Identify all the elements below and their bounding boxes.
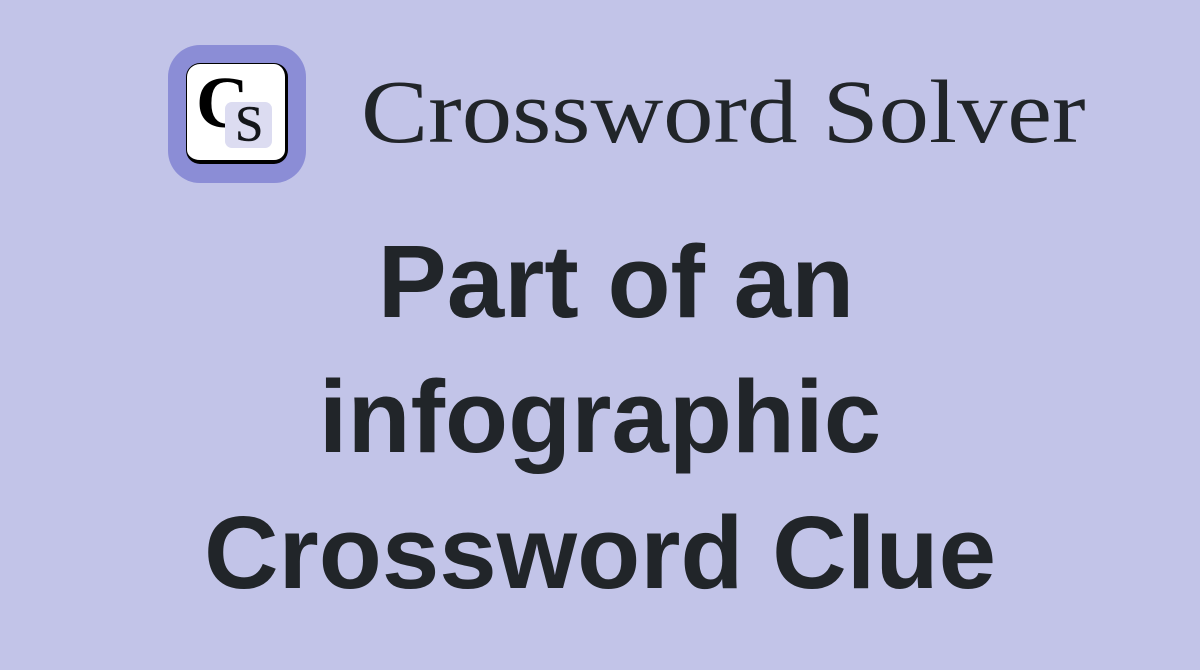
icon: letter S: S bbox=[235, 97, 263, 153]
icon: outer rounded square bbox=[168, 45, 306, 183]
logo icon bbox=[168, 45, 306, 183]
title line 2: infographic bbox=[319, 358, 881, 474]
icon: white tile bbox=[186, 63, 288, 164]
icon: letter C: C bbox=[196, 62, 249, 142]
title line 1: Part of an bbox=[378, 223, 854, 339]
brand name: Crossword Solver bbox=[361, 63, 1086, 162]
title line 3: Crossword Clue bbox=[204, 494, 996, 610]
icon: small lavender square bbox=[225, 102, 272, 148]
